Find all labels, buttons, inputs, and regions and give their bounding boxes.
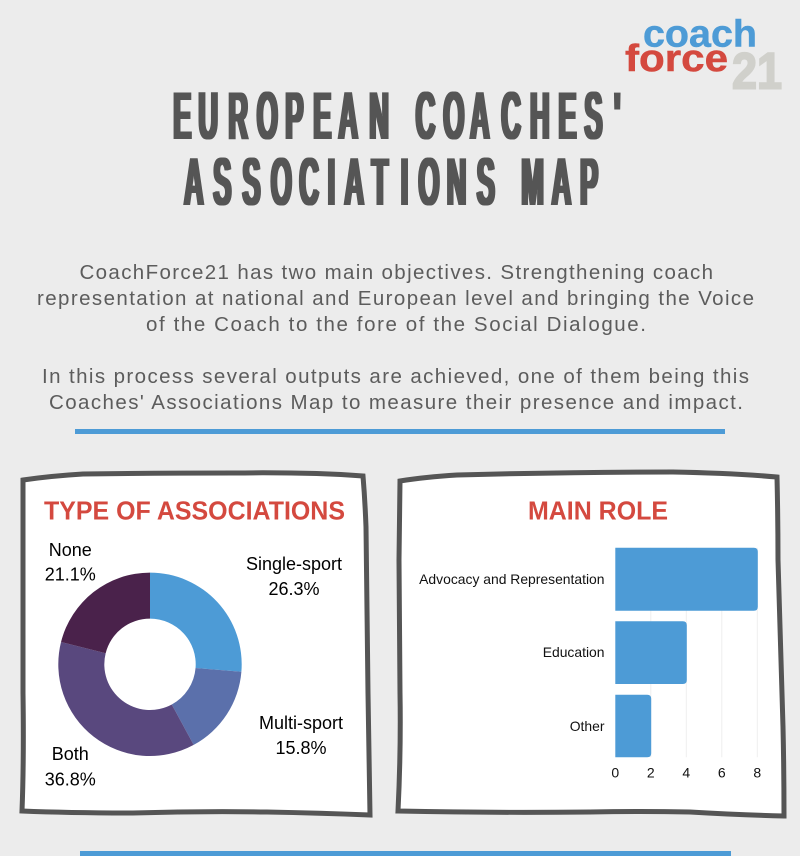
bar chart: 8: [753, 765, 761, 781]
bar chart: Other: [570, 718, 605, 734]
donut labels: 15.8%: [275, 738, 327, 758]
heading: type of associations: TYPE OF ASSOCIATIONS: [44, 497, 345, 525]
donut chart: [58, 573, 242, 756]
heading: main role: MAIN ROLE: [528, 497, 668, 525]
bar chart: 0: [611, 765, 619, 781]
donut labels: 26.3%: [268, 579, 320, 599]
bar chart: [419, 548, 761, 781]
bar chart: 4: [682, 765, 690, 781]
bar chart: Advocacy and Representation: [419, 571, 604, 587]
bar chart: 2: [647, 765, 655, 781]
donut labels: 21.1%: [45, 565, 96, 585]
donut labels: 36.8%: [45, 770, 96, 790]
intro text: Coaches' Associations Map to measure their presence and impact.: [49, 391, 743, 414]
logo: coachforce21: coach: [643, 14, 757, 56]
intro text: In this process several outputs are achieved, one of them being this: [42, 365, 749, 388]
donut labels: None: [49, 540, 92, 560]
title: ASSOCIATIONS MAP: [184, 143, 598, 219]
logo: coachforce21: [625, 14, 782, 99]
donut labels: Single-sport: [246, 554, 342, 574]
panel: main role: [398, 472, 784, 816]
title: EUROPEAN COACHES': [173, 77, 620, 153]
donut labels: Both: [52, 744, 89, 764]
logo: coachforce21: 21: [732, 42, 782, 99]
logo: coachforce21: force: [625, 38, 728, 80]
intro text: CoachForce21 has two main objectives. Strengthening coach: [80, 261, 713, 284]
bar chart: 6: [718, 765, 726, 781]
title: [173, 77, 620, 219]
donut labels: [45, 540, 343, 790]
panel: type of associations: [22, 473, 370, 815]
intro text: of the Coach to the fore of the Social Dialogue.: [146, 313, 646, 336]
donut labels: Multi-sport: [259, 713, 343, 733]
bar chart: Education: [543, 644, 604, 660]
intro text: [37, 261, 754, 414]
intro text: representation at national and European level and bringing the Voice: [37, 287, 754, 310]
